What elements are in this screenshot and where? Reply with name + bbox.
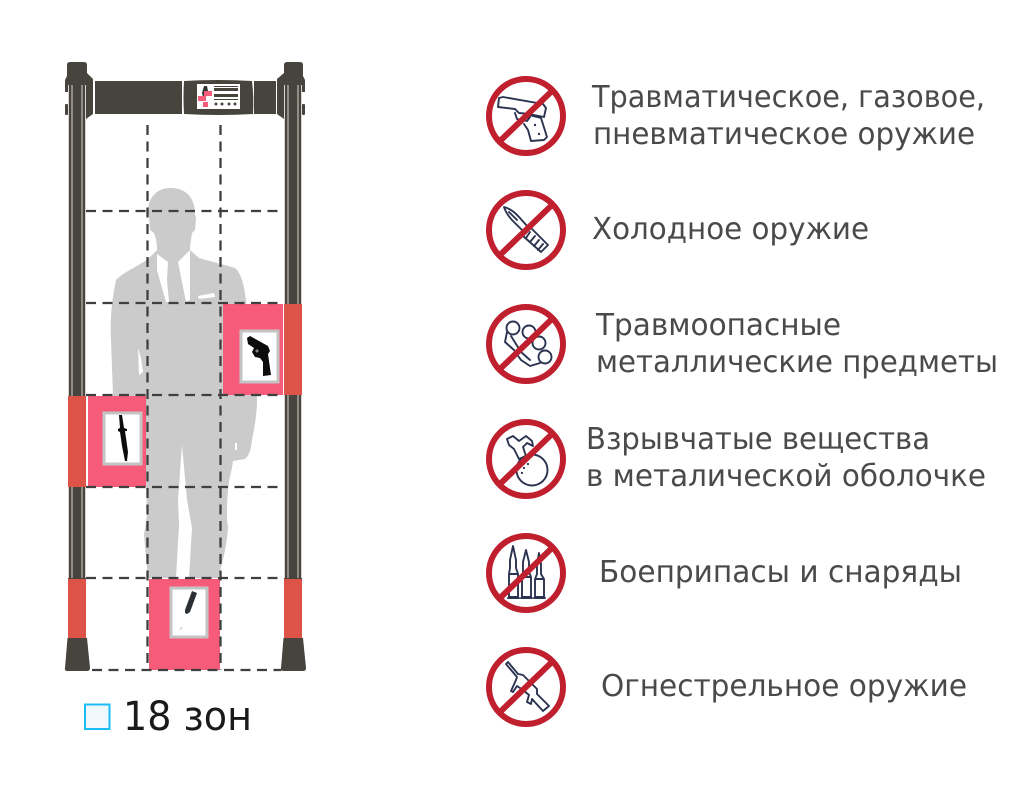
label: Травматическое, газовое,	[591, 80, 985, 115]
icon: knife	[118, 415, 128, 461]
left post	[68, 84, 86, 580]
icon: prohibited brass knuckles	[489, 307, 563, 381]
icon: prohibited grenade	[489, 422, 563, 496]
item: traumatic metal objects	[489, 307, 998, 381]
dashed zone grid	[86, 125, 284, 670]
icon: prohibited assault rifle	[489, 650, 563, 724]
label: в металической оболочке	[586, 459, 986, 494]
left foot	[65, 638, 90, 671]
right cap	[277, 62, 305, 119]
human silhouette	[111, 188, 257, 578]
label: пневматическое оружие	[593, 117, 975, 152]
control panel display	[197, 84, 240, 109]
item: explosives in metal casing	[489, 422, 986, 496]
icon: prohibited knife	[489, 193, 563, 267]
highlighted zone: pen	[149, 579, 220, 670]
right post	[284, 84, 302, 580]
label: Огнестрельное оружие	[601, 669, 967, 704]
label	[595, 308, 998, 380]
label: Травмоопасные	[595, 308, 841, 343]
icon: pen	[180, 591, 197, 630]
label: Взрывчатые вещества	[586, 422, 930, 457]
label: Боеприпасы и снаряды	[599, 555, 962, 590]
icon: prohibited bullets	[489, 536, 563, 610]
highlighted zone: knife	[68, 396, 146, 487]
item: traumatic, gas, pneumatic weapons	[489, 79, 985, 153]
highlighted zone: revolver	[223, 304, 302, 395]
label	[586, 422, 986, 494]
item: ammunition	[489, 536, 962, 610]
right foot	[281, 638, 306, 671]
lower red zone left	[68, 579, 86, 638]
metal detector frame	[65, 62, 306, 671]
icon: revolver	[247, 336, 271, 376]
crossbar	[95, 80, 276, 115]
label: Холодное оружие	[592, 212, 869, 247]
icon: prohibited pistol	[489, 79, 563, 153]
legend: 18 zones: 18 зон	[123, 694, 252, 740]
lower red zone right	[284, 579, 302, 638]
left cap	[65, 62, 93, 119]
item: firearms	[489, 650, 967, 724]
item: cold weapons	[489, 193, 869, 267]
label	[591, 80, 985, 152]
label: металлические предметы	[596, 345, 998, 380]
